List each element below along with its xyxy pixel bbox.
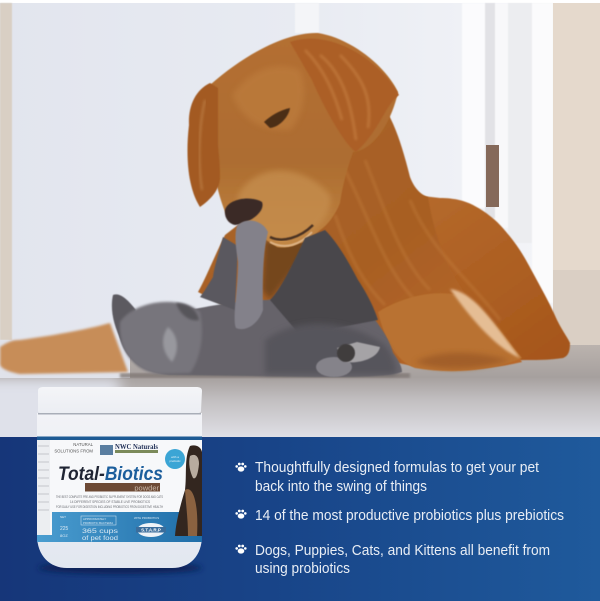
dog front paw (378, 293, 522, 371)
dog head (209, 33, 398, 248)
servings text (60, 515, 159, 542)
label band blue (37, 512, 202, 542)
bullet 3: using probiotics (255, 560, 350, 577)
servings text: of pet food (82, 535, 118, 542)
jar body (37, 413, 202, 568)
product name: Total-Biotics (58, 464, 163, 485)
bullet 3: Dogs, Puppies, Cats, and Kittens all benefit from (255, 542, 550, 559)
fine print: 14 DIFFERENT SPECIES OF STABLE LIVE PROBIOTICS (70, 500, 150, 504)
fur strands (335, 160, 500, 320)
blue seal (165, 449, 185, 469)
bullet 3 (235, 542, 550, 577)
bullet 1: Thoughtfully designed formulas to get your pet (255, 459, 540, 476)
fine print: FOR DAILY USE FOR DIGESTION INCLUDING PROBIOTICS FROM DIGESTIVE HEALTH (56, 505, 164, 509)
dog nose (225, 199, 263, 225)
product jar: S.T.A.R.P (141, 528, 161, 532)
kitten (112, 220, 402, 377)
powder bar (85, 483, 160, 492)
star badge (137, 523, 165, 537)
dog front leg left (0, 323, 128, 374)
bullet 1: back into the swing of things (255, 478, 427, 495)
jar lid (38, 387, 202, 413)
dog (0, 33, 570, 374)
dog left ear (187, 83, 220, 207)
servings text: WITH PROBIOTICS (134, 516, 159, 520)
dog body (424, 196, 571, 361)
kitten hind paws (316, 357, 352, 377)
paw icon 2 (235, 510, 247, 519)
jar label (37, 439, 202, 542)
dog mouth (270, 225, 313, 240)
product jar: prebiotic (169, 459, 181, 463)
dog eye (264, 108, 290, 128)
nutrition panel (37, 440, 50, 540)
dog muzzle (238, 171, 331, 243)
photo background: room (0, 0, 600, 458)
fine print (56, 495, 164, 509)
door hinge (486, 145, 499, 207)
servings text: 8OZ (60, 533, 68, 538)
bullet list (235, 459, 564, 577)
product jar (37, 387, 202, 568)
fine print: THE BEST COMPLETE PRE AND PROBIOTIC SUPPLEMENT SYSTEM FOR DOGS AND CATS (56, 495, 163, 499)
dark chest under chin (262, 240, 303, 300)
product jar: with a (171, 455, 179, 459)
kitten body (118, 298, 402, 377)
floor (0, 345, 600, 437)
dog right ear (290, 39, 399, 152)
blue panel (0, 437, 600, 601)
bullet 1 (235, 459, 540, 495)
bullet 2: 14 of the most productive probiotics plus prebiotics (255, 507, 564, 524)
product jar: SOLUTIONS FROM (54, 448, 93, 454)
servings text: PROBIOTIC BACTERIA (83, 521, 113, 525)
jar shadow (38, 562, 202, 574)
product jar: powder (134, 484, 159, 492)
kitten left arm (200, 237, 238, 310)
dog forehead (236, 69, 302, 128)
servings text: NET (60, 515, 66, 519)
product jar: NWC Naturals (115, 443, 158, 451)
servings text: APPROXIMATELY (83, 517, 106, 521)
paw icon 1 (235, 463, 247, 472)
kitten head (120, 302, 202, 374)
dog on label (175, 445, 202, 536)
kitten ear (112, 294, 136, 342)
paw icon 3 (235, 545, 247, 554)
brand strap: NATURAL (73, 442, 94, 447)
kitten raised paw (235, 220, 268, 329)
servings text: 225 (60, 526, 69, 532)
dog chest and neck (198, 108, 522, 370)
servings text: 365 cups (82, 528, 119, 535)
kitten dark shoulder (270, 230, 378, 335)
